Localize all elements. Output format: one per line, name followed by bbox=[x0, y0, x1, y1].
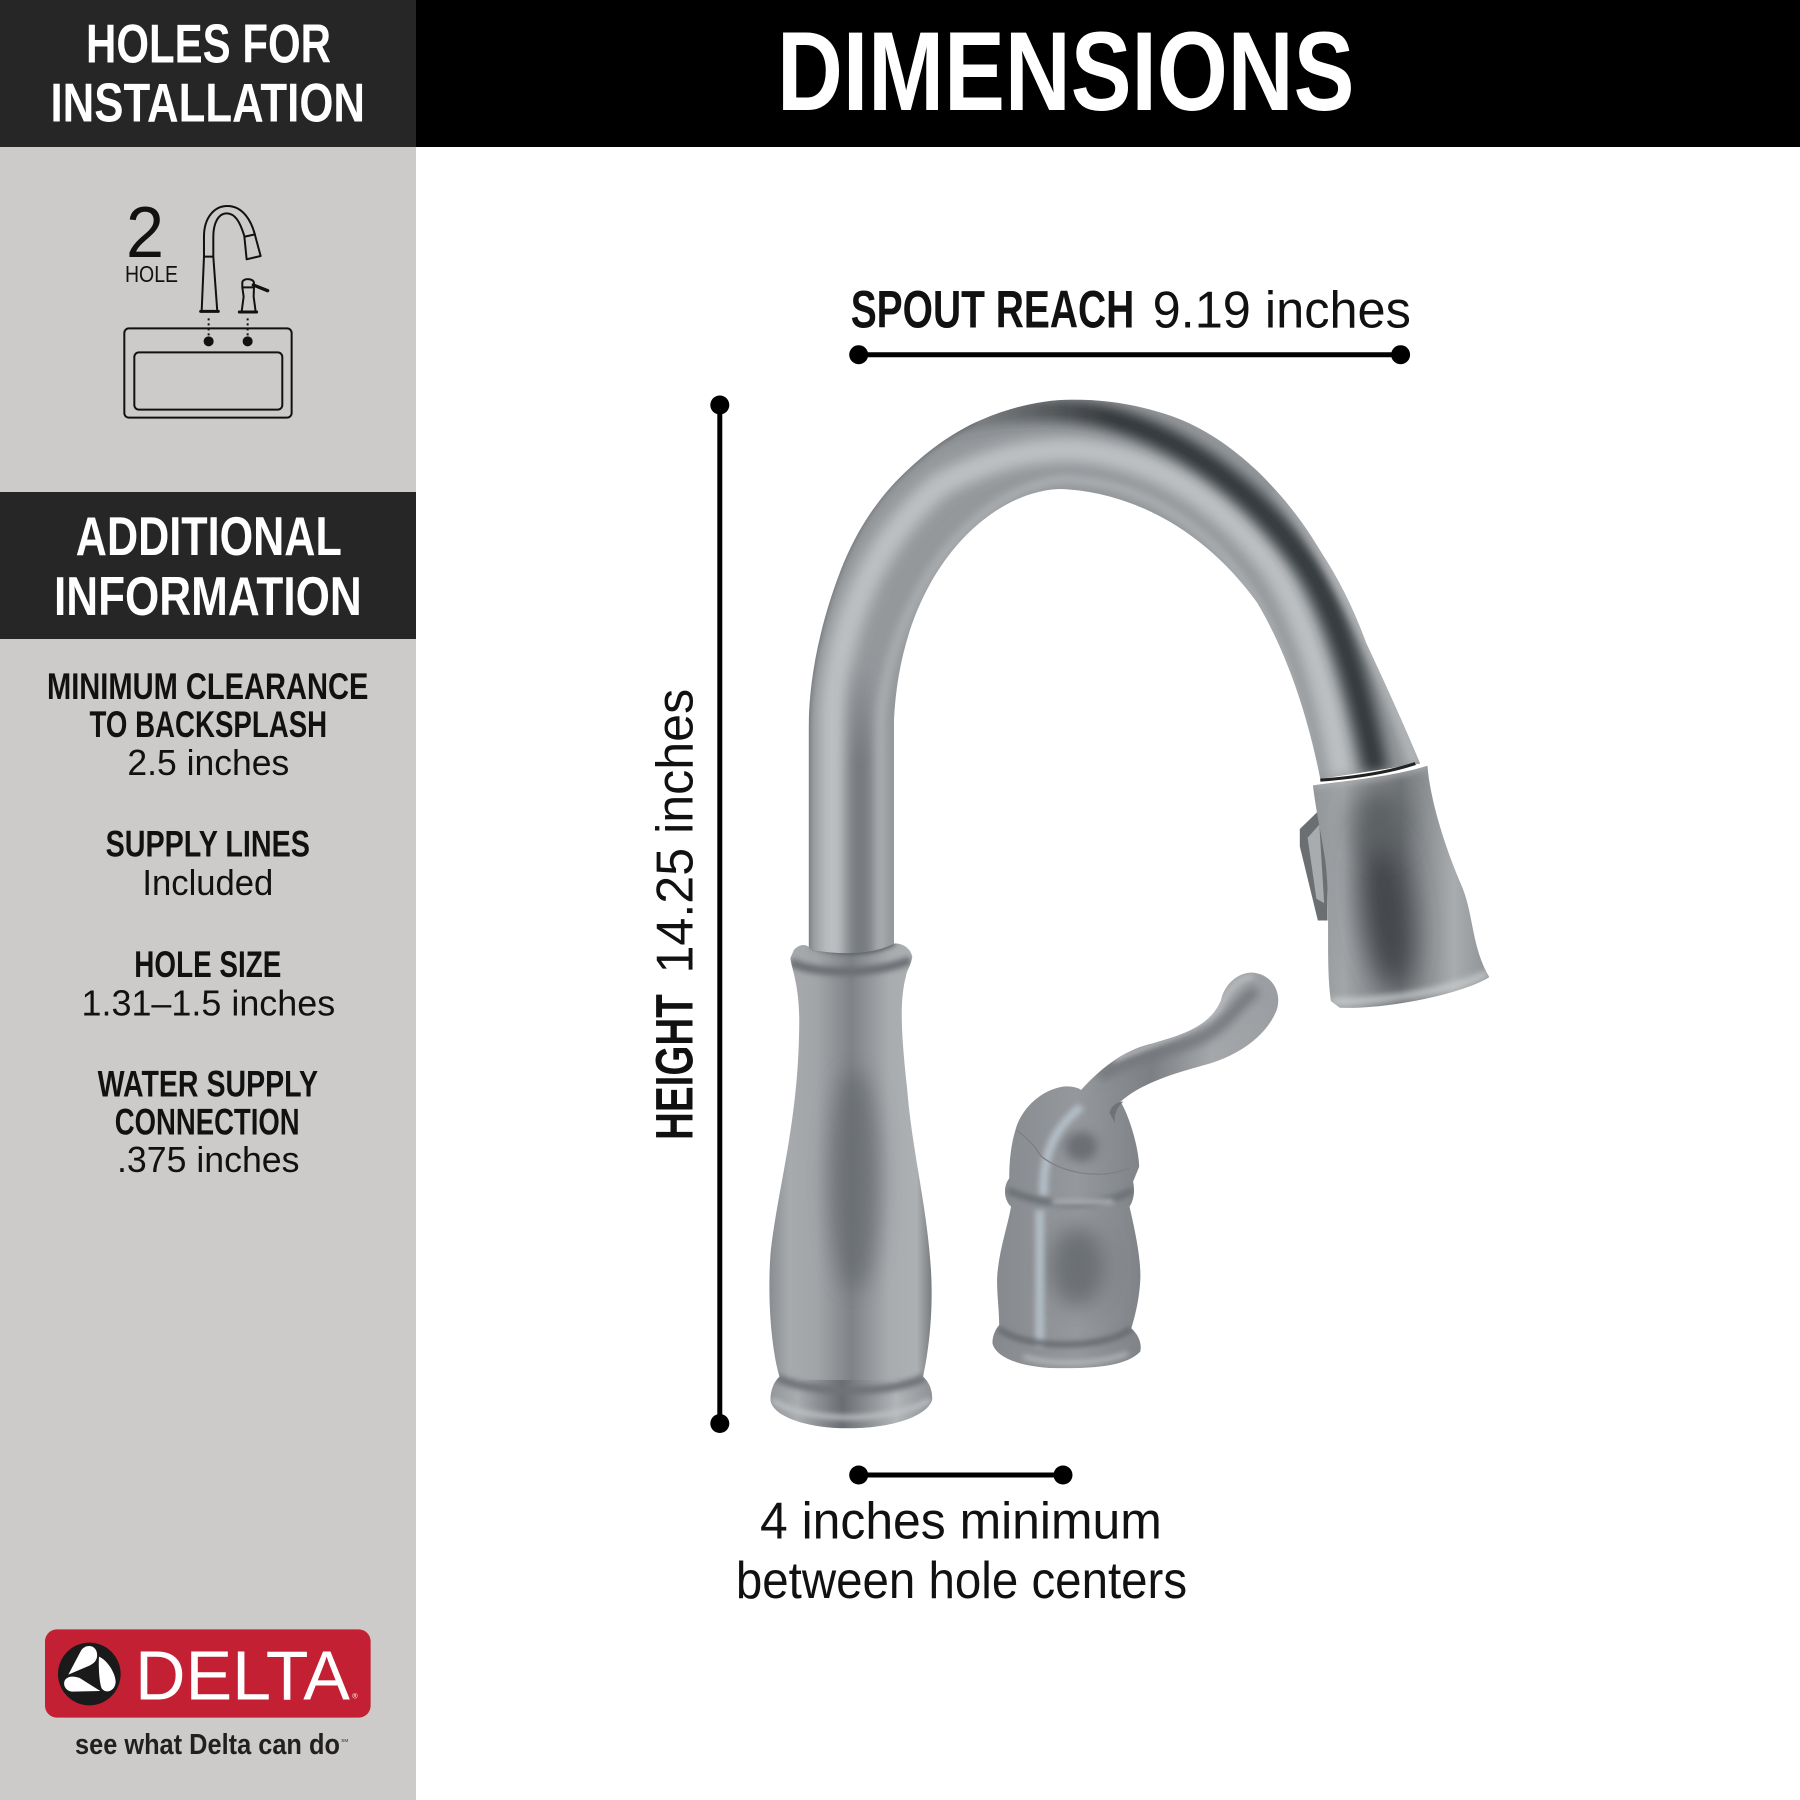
dimension: height: HEIGHT bbox=[646, 994, 704, 1140]
text block: minimum clearance: TO BACKSPLASH bbox=[90, 704, 327, 745]
logo: delta: DELTA bbox=[135, 1636, 350, 1714]
dimension: spout reach bbox=[849, 280, 1411, 364]
heading bar: holes for installation: HOLES FOR bbox=[86, 12, 331, 74]
text block: supply lines: SUPPLY LINES bbox=[106, 824, 310, 865]
dimension: hole spacing: 4 inches minimum bbox=[760, 1492, 1162, 1550]
dimension: hole spacing bbox=[736, 1466, 1187, 1610]
logo: delta: ® bbox=[352, 1692, 358, 1701]
text block: water supply connection: CONNECTION bbox=[115, 1101, 300, 1142]
icon: two hole sink diagram: HOLE bbox=[125, 261, 178, 287]
text block: hole size bbox=[82, 944, 335, 1024]
text block: supply lines bbox=[106, 824, 310, 903]
text block: minimum clearance: MINIMUM CLEARANCE bbox=[47, 666, 368, 707]
text block: water supply connection: WATER SUPPLY bbox=[98, 1064, 318, 1104]
text block: minimum clearance: 2.5 inches bbox=[127, 742, 289, 783]
dimension: spout reach: SPOUT REACH bbox=[851, 280, 1134, 340]
icon: two hole sink diagram bbox=[124, 193, 292, 418]
faucet: spout and spray head bbox=[789, 389, 1496, 1016]
logo: delta: see what Delta can do bbox=[75, 1729, 340, 1761]
text block: supply lines: Included bbox=[142, 862, 273, 903]
main body bbox=[769, 943, 932, 1428]
dimension: height bbox=[646, 396, 729, 1433]
faucet: base and side handle bbox=[762, 940, 1286, 1433]
dimension: hole spacing: between hole centers bbox=[736, 1552, 1187, 1610]
icon: two hole sink diagram: 2 bbox=[126, 193, 164, 273]
text block: hole size: 1.31–1.5 inches bbox=[82, 982, 335, 1024]
text block: hole size: HOLE SIZE bbox=[134, 944, 281, 985]
heading bar: holes for installation: INSTALLATION bbox=[50, 72, 365, 134]
dimension: spout reach: 9.19 inches bbox=[1153, 282, 1411, 340]
heading bar: additional information: ADDITIONAL bbox=[76, 505, 342, 567]
panel: left sidebar bbox=[0, 0, 416, 1800]
spray button bbox=[1300, 812, 1328, 921]
logo: delta bbox=[45, 1629, 371, 1761]
heading bar: additional information: INFORMATION bbox=[54, 565, 362, 627]
dimension: height: 14.25 inches bbox=[646, 689, 704, 974]
text block: water supply connection: .375 inches bbox=[117, 1139, 300, 1180]
heading bar: holes for installation bbox=[0, 0, 416, 147]
text block: water supply connection bbox=[98, 1064, 318, 1180]
text block: minimum clearance bbox=[47, 666, 368, 783]
title bar: dimensions: DIMENSIONS bbox=[777, 9, 1354, 134]
heading bar: additional information bbox=[0, 492, 416, 639]
side handle body bbox=[988, 967, 1286, 1373]
title bar: dimensions bbox=[416, 0, 1800, 147]
logo: delta: SM bbox=[341, 1738, 348, 1743]
